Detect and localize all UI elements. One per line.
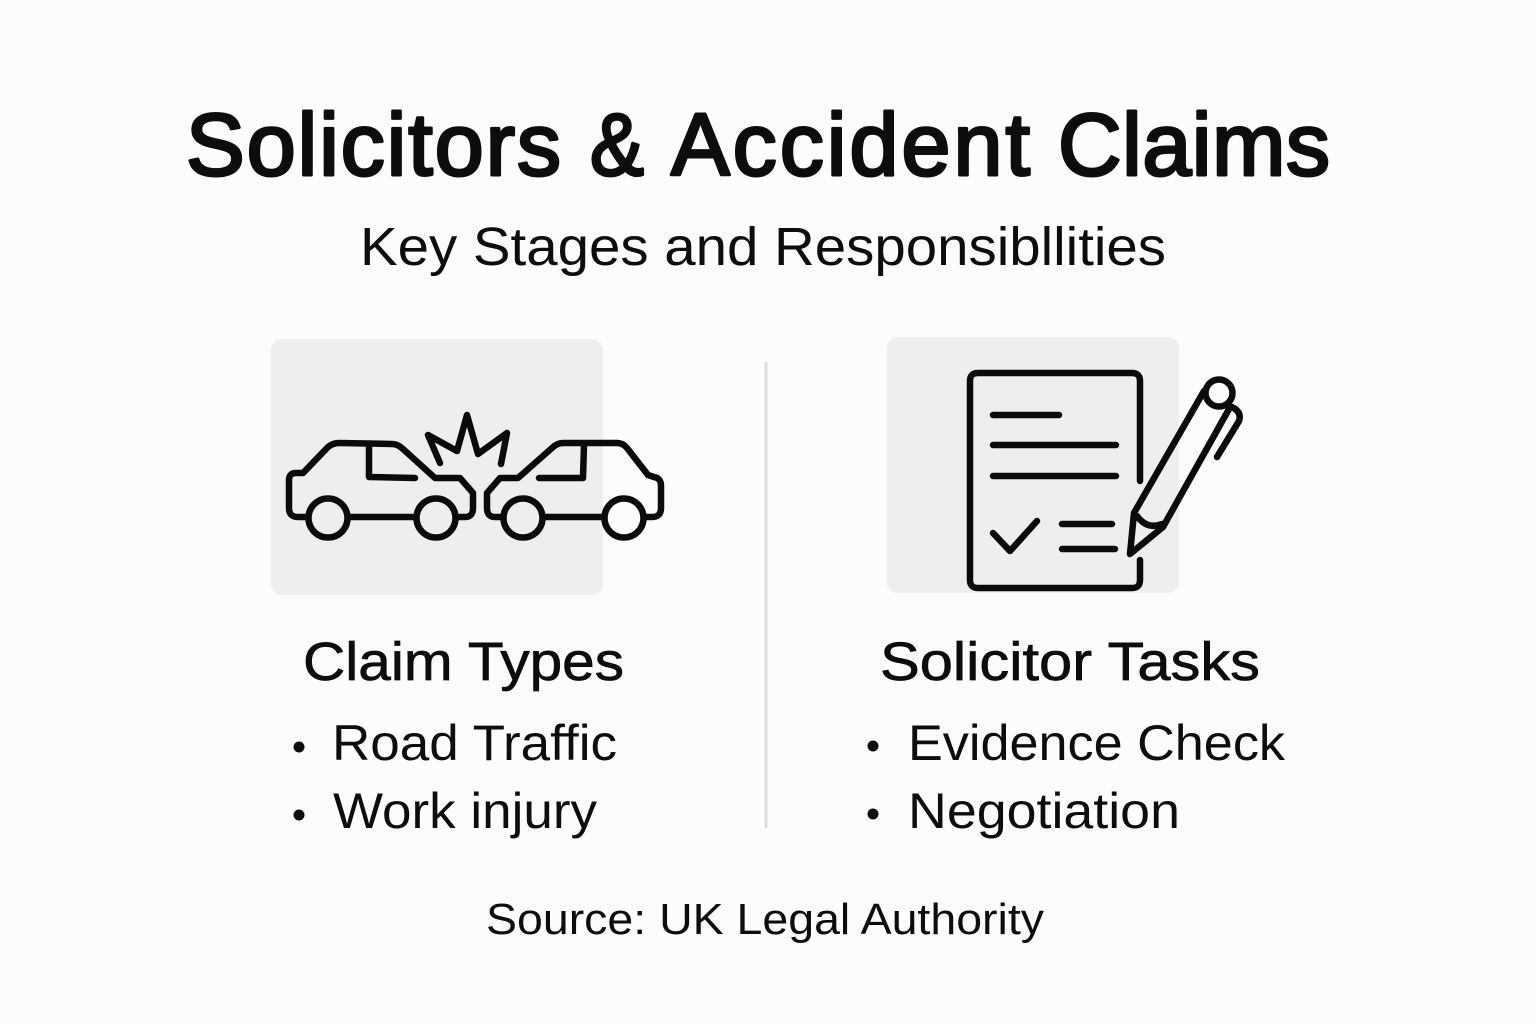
left car [289, 443, 473, 538]
bullet list: solicitor tasks: Negotiation [908, 783, 1180, 839]
pen [1130, 380, 1240, 554]
collision burst [428, 415, 507, 464]
panel: solicitor tasks [868, 337, 1286, 839]
title: & [590, 95, 644, 194]
bullet list: claim types: Work injury [333, 783, 597, 839]
bullet list: solicitor tasks: Evidence Check [908, 715, 1286, 771]
subtitle: Key Stages and Responsibllities [360, 217, 1166, 277]
title: Solicitors [186, 95, 561, 194]
icon: document and pen [970, 373, 1240, 588]
icon background: solicitor tasks [887, 337, 1179, 593]
bullet list: claim types: Road Traffic [332, 715, 617, 771]
document [970, 373, 1140, 588]
title: Claims [1058, 95, 1330, 194]
source line: Source: UK Legal Authority [486, 895, 1044, 944]
right car [487, 443, 661, 538]
bullet list: claim types [294, 715, 617, 839]
panel: claim types [271, 339, 661, 839]
heading: solicitor tasks: Solicitor Tasks [880, 632, 1260, 692]
icon background: claim types [271, 339, 603, 595]
bullet list: solicitor tasks [868, 715, 1286, 839]
title: Accident [671, 95, 1030, 194]
icon: car collision [289, 415, 661, 538]
heading: claim types: Claim Types [303, 632, 624, 692]
